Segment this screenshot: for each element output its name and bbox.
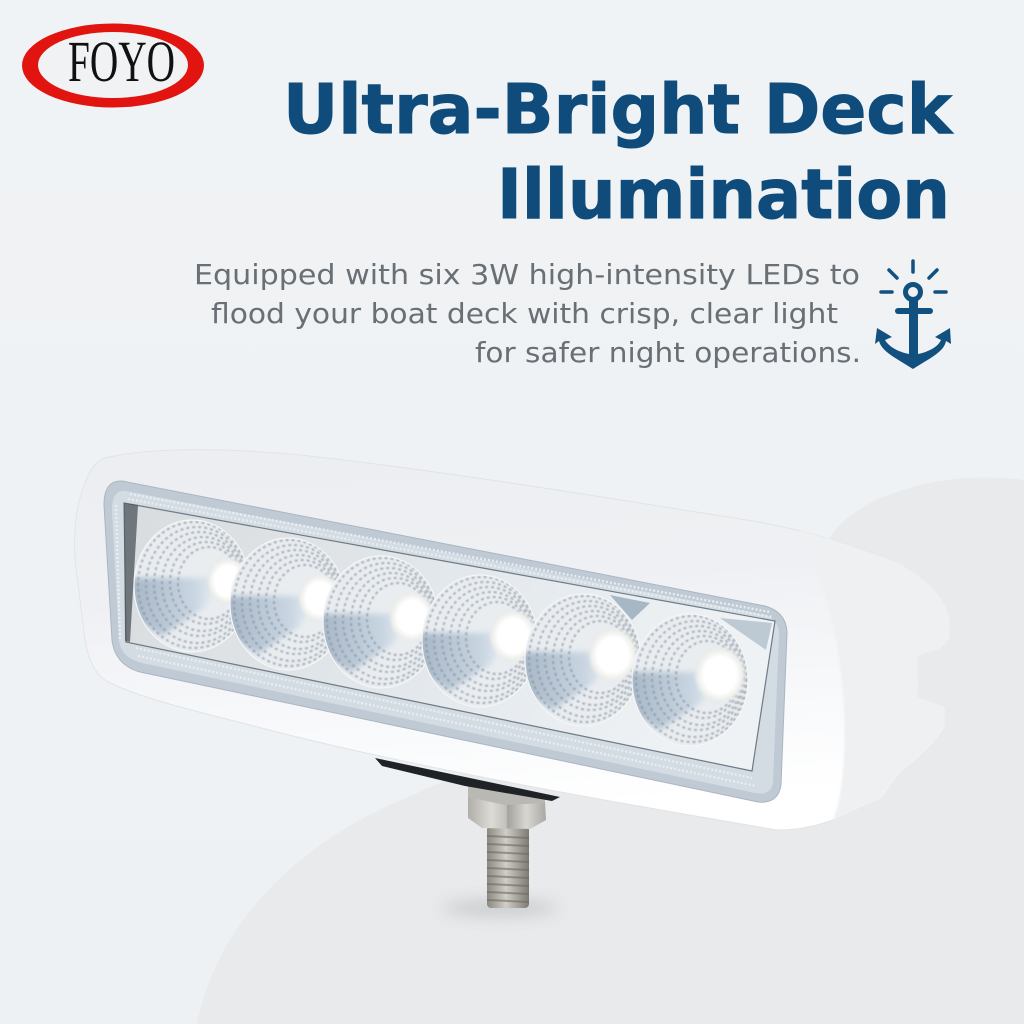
- front glass frame: [104, 481, 787, 802]
- shadow under bolt: [442, 900, 558, 916]
- lens 2: [226, 538, 346, 670]
- white housing: [75, 450, 950, 830]
- description text: flood your boat deck with crisp, clear light: [211, 297, 838, 330]
- title: Illumination: [497, 155, 950, 235]
- lens 3: [319, 556, 439, 688]
- lens 1: [130, 520, 250, 652]
- lens 6: [628, 614, 748, 746]
- mounting bolt: [468, 786, 546, 908]
- icon: anchor with light rays: [875, 261, 951, 369]
- logo: FOYO: [22, 24, 204, 108]
- background blob: [197, 477, 1024, 1024]
- frame dotted texture: [116, 494, 772, 786]
- logo: FOYO: FOYO: [68, 29, 175, 94]
- lens 4: [418, 575, 538, 707]
- title: [283, 70, 954, 235]
- right side shading: [800, 530, 950, 820]
- title: Ultra-Bright Deck: [283, 70, 954, 150]
- inner window: [124, 503, 775, 771]
- black gasket: [375, 758, 560, 801]
- description text: for safer night operations.: [475, 336, 861, 369]
- description text: Equipped with six 3W high-intensity LEDs to: [194, 258, 860, 291]
- lens 5: [521, 594, 641, 726]
- product: LED deck light: [75, 450, 950, 916]
- description text: [194, 258, 861, 369]
